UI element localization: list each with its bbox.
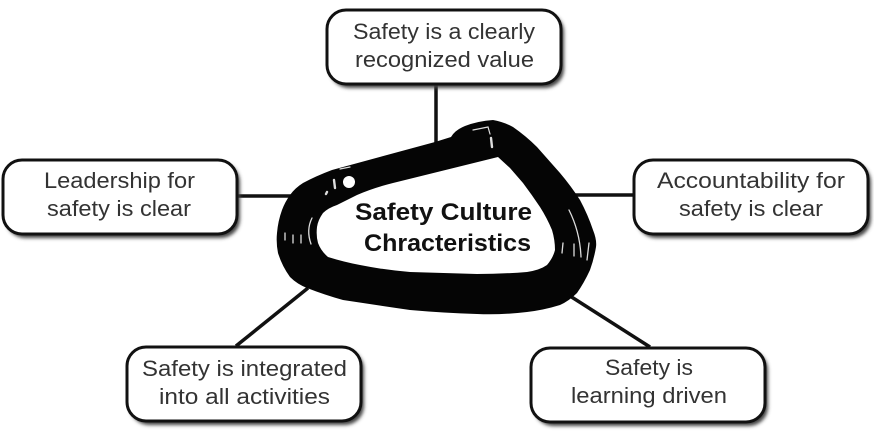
box: integrated: into all activities — [159, 384, 330, 409]
gate rivet hole — [343, 176, 355, 188]
box: integrated: Safety is integrated — [142, 356, 347, 381]
box: accountability — [634, 160, 871, 238]
box: clearly recognized value: recognized value — [355, 47, 534, 72]
box: learning driven: learning driven — [571, 383, 727, 408]
box: learning driven — [531, 348, 768, 426]
box: accountability: Accountability for — [657, 168, 845, 193]
icon: carabiner — [277, 120, 596, 314]
box: leadership — [3, 160, 240, 238]
box: clearly recognized value: Safety is a clearly — [353, 19, 535, 44]
box: clearly recognized value — [327, 10, 564, 88]
box: leadership: Leadership for — [44, 168, 195, 193]
carabiner highlights — [285, 127, 589, 260]
box: accountability: safety is clear — [679, 196, 823, 221]
title — [355, 199, 532, 257]
connector lines — [236, 84, 650, 347]
box: learning driven: Safety is — [605, 355, 693, 380]
box: leadership: safety is clear — [47, 196, 191, 221]
title: Chracteristics — [364, 230, 531, 257]
title: Safety Culture — [355, 199, 532, 226]
box: integrated — [127, 347, 364, 425]
